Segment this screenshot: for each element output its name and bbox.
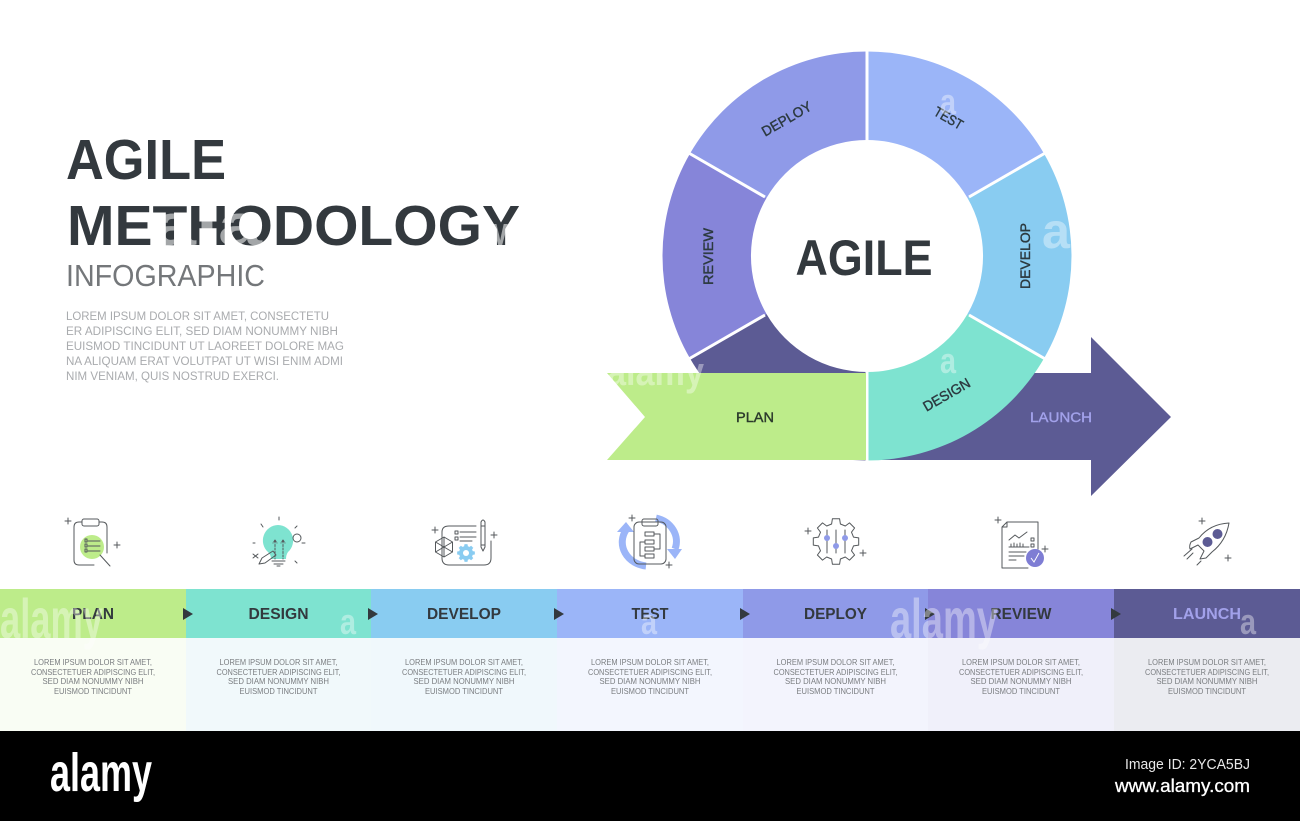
segment: deploy — [690, 52, 867, 198]
step: plan: EUISMOD TINCIDUNT — [54, 686, 133, 696]
alamy watermarks — [0, 81, 1257, 650]
icon: design lightbulb — [253, 517, 305, 566]
step: launch — [1114, 589, 1300, 731]
step: design: SED DIAM NONUMMY NIBH — [228, 676, 329, 686]
step: launch: SED DIAM NONUMMY NIBH — [1156, 676, 1258, 686]
step: review: LOREM IPSUM DOLOR SIT AMET, — [962, 657, 1080, 667]
step: review: SED DIAM NONUMMY NIBH — [970, 676, 1072, 686]
intro text block: ER ADIPISCING ELIT, SED DIAM NONUMMY NIBH — [66, 326, 338, 338]
segment: test: TEST — [931, 103, 966, 133]
step: review: EUISMOD TINCIDUNT — [982, 686, 1061, 696]
alamy watermarks: a — [641, 601, 658, 642]
step: design: DESIGN — [248, 606, 308, 623]
alamy watermarks: alamy — [607, 350, 705, 394]
watermark over title: ala — [152, 193, 263, 258]
step: plan: PLAN — [72, 606, 114, 623]
alamy watermarks: a — [340, 601, 357, 642]
step: deploy: SED DIAM NONUMMY NIBH — [785, 676, 886, 686]
alamy watermarks: a — [940, 340, 957, 381]
intro text block: NIM VENIAM, QUIS NOSTRUD EXERCI. — [66, 371, 279, 383]
step: test: SED DIAM NONUMMY NIBH — [600, 676, 700, 686]
icon: review document — [995, 517, 1048, 568]
step: test: EUISMOD TINCIDUNT — [611, 686, 690, 696]
step: test: CONSECTETUER ADIPISCING ELIT, — [588, 667, 712, 677]
step: review: REVIEW — [990, 606, 1052, 623]
watermark over title — [152, 193, 509, 258]
intro text block: EUISMOD TINCIDUNT UT LAOREET DOLORE MAG — [66, 341, 344, 353]
step: launch: LAUNCH — [1173, 606, 1241, 623]
arrow: launch — [868, 337, 1171, 496]
step: deploy: EUISMOD TINCIDUNT — [796, 686, 875, 696]
banner: plan — [607, 373, 866, 460]
step: deploy: DEPLOY — [804, 606, 867, 623]
segment: review — [663, 154, 766, 358]
step: deploy: CONSECTETUER ADIPISCING ELIT, — [774, 667, 898, 677]
intro text block — [66, 311, 344, 383]
step: develop: CONSECTETUER ADIPISCING ELIT, — [402, 667, 526, 677]
step: develop: EUISMOD TINCIDUNT — [425, 686, 504, 696]
alamy watermarks: a — [1042, 203, 1071, 259]
icon: launch rocket — [1184, 518, 1231, 565]
step: deploy — [743, 589, 928, 731]
step: develop — [371, 589, 557, 731]
segment: review: REVIEW — [700, 227, 716, 285]
step: plan: CONSECTETUER ADIPISCING ELIT, — [31, 667, 155, 677]
step: launch: LOREM IPSUM DOLOR SIT AMET, — [1148, 657, 1266, 667]
intro text block: LOREM IPSUM DOLOR SIT AMET, CONSECTETU — [66, 311, 329, 323]
step: develop: LOREM IPSUM DOLOR SIT AMET, — [405, 657, 523, 667]
step: plan — [0, 589, 186, 731]
step: design: EUISMOD TINCIDUNT — [240, 686, 318, 696]
watermark over title: y — [492, 210, 509, 254]
step: design — [186, 589, 371, 731]
subtitle: infographic: INFOGRAPHIC — [66, 258, 265, 293]
segment: deploy: DEPLOY — [759, 98, 815, 139]
arrow: launch: LAUNCH — [1030, 409, 1092, 425]
step: test: LOREM IPSUM DOLOR SIT AMET, — [591, 657, 709, 667]
footer bar — [0, 731, 1300, 821]
step: launch: CONSECTETUER ADIPISCING ELIT, — [1145, 667, 1269, 677]
icon: plan clipboard — [65, 518, 120, 566]
step: test: TEST — [632, 606, 669, 623]
step: develop: SED DIAM NONUMMY NIBH — [414, 676, 514, 686]
footer url: www.alamy.com — [1114, 776, 1250, 796]
title: Agile Methodology — [66, 128, 520, 258]
footer image id: Image ID: 2YCA5BJ — [1125, 756, 1250, 773]
step: design: LOREM IPSUM DOLOR SIT AMET, — [220, 657, 338, 667]
icon: test clipboard with cycle — [617, 515, 682, 568]
title: Agile Methodology: AGILE — [66, 128, 226, 192]
alamy watermarks: a — [1240, 601, 1257, 642]
step: launch: EUISMOD TINCIDUNT — [1168, 686, 1247, 696]
alamy watermarks: a — [940, 81, 957, 122]
cycle diagram — [607, 48, 1171, 496]
step: develop: DEVELOP — [427, 606, 501, 623]
alamy watermarks: alamy — [890, 587, 998, 650]
step connector arrows — [183, 608, 1121, 620]
intro text block: NA ALIQUAM ERAT VOLUTPAT UT WISI ENIM ADMI — [66, 356, 343, 368]
footer logo: alamy — [50, 743, 152, 803]
step: plan: LOREM IPSUM DOLOR SIT AMET, — [34, 657, 152, 667]
segment: design — [867, 314, 1044, 460]
icon: deploy gear sliders — [805, 519, 866, 564]
segment: launch ring end — [690, 314, 867, 460]
icon: develop blueprint — [432, 520, 497, 565]
alamy watermarks: alamy — [0, 587, 103, 650]
segment: develop: DEVELOP — [1017, 223, 1033, 289]
segment: design: DESIGN — [920, 375, 973, 414]
center label: AGILE — [796, 230, 932, 286]
step: design: CONSECTETUER ADIPISCING ELIT, — [216, 667, 340, 677]
title: Agile Methodology: METHODOLOGY — [67, 194, 520, 258]
step: plan: SED DIAM NONUMMY NIBH — [42, 676, 144, 686]
segment: test — [867, 52, 1044, 198]
step: review — [928, 589, 1114, 731]
step: deploy: LOREM IPSUM DOLOR SIT AMET, — [776, 657, 894, 667]
segment: develop — [968, 154, 1071, 358]
step: test — [557, 589, 743, 731]
banner: plan: PLAN — [736, 409, 774, 425]
step: review: CONSECTETUER ADIPISCING ELIT, — [959, 667, 1083, 677]
